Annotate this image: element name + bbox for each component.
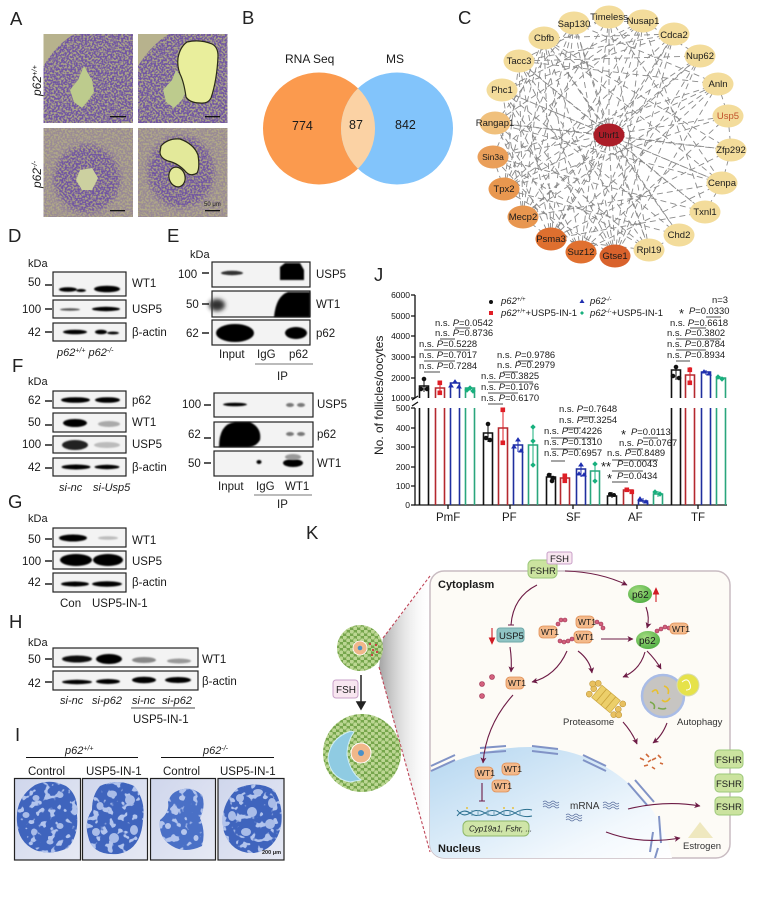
blot WT1 WT1 IP: WT1 (317, 458, 341, 470)
statistics AF (601, 426, 677, 486)
ovary control wild type (14, 778, 80, 860)
statistics PF: n.s. P=0.2979 (497, 359, 555, 370)
blot WT1 (28, 272, 156, 296)
peptide debris (640, 754, 663, 769)
statistics TF: n=3 (712, 294, 728, 305)
blot USP5: USP5 (132, 439, 162, 451)
statistics AF: P=0.0113 (631, 426, 671, 437)
label C: C (458, 7, 471, 28)
blot WT1: 50 (28, 277, 41, 289)
y tick labels: 100 (396, 481, 410, 491)
histology image bottom left (44, 128, 133, 217)
blot p62 WT1 IP (188, 422, 336, 447)
network nodes: Tacc3 (507, 56, 531, 67)
set label MS: MS (386, 52, 404, 66)
group label p62+/+: +/+ (83, 746, 93, 752)
proteasome (582, 677, 630, 721)
blot WT1 (28, 413, 156, 432)
blot beta-actin (28, 458, 167, 476)
statistics SF (544, 403, 617, 458)
statistics SF: n.s. P=0.6957 (544, 447, 602, 458)
blot USP5 (22, 551, 162, 569)
arrow to proteasome (578, 651, 592, 673)
y axis title: No. of follicles/oocytes (372, 336, 386, 455)
blot USP5 (22, 436, 162, 453)
FSH arrow (357, 675, 365, 709)
y tick labels: 200 (396, 462, 410, 472)
legend: p62 (590, 296, 606, 307)
network nodes: Chd2 (668, 230, 690, 241)
network nodes: Suz12 (568, 247, 594, 258)
free ubiquitin (480, 674, 494, 698)
kDa heading: kDa (28, 513, 48, 525)
y tick labels: 5000 (391, 311, 410, 321)
small follicle (337, 625, 383, 671)
gene box (463, 821, 532, 836)
inhibition WT1 to DNA (479, 783, 485, 801)
network nodes: Phc1 (491, 85, 513, 96)
panel C: interaction network (458, 6, 746, 268)
arrow p62 to proteasome (623, 652, 645, 677)
statistics PF (481, 349, 555, 403)
legend (489, 296, 663, 319)
blot USP5 p62 IP (178, 262, 346, 287)
statistics SF: n.s. P=0.7648 (559, 403, 617, 414)
sample labels: p62 (85, 347, 107, 359)
statistics PmF: n.s. P=0.0542 (435, 317, 493, 328)
set label RNA Seq: RNA Seq (285, 52, 334, 66)
statistics PmF: n.s. P=0.5228 (419, 338, 477, 349)
label A: A (10, 8, 23, 29)
arrow WT1 to nucleus (483, 695, 513, 763)
legend: +USP5-IN-1 (526, 308, 577, 319)
IP bracket (255, 364, 313, 383)
arrow autophagy to peptides (653, 723, 667, 743)
panel I: ovary sections (14, 724, 284, 860)
kDa heading: kDa (28, 637, 48, 649)
blot beta-actin: 42 (28, 327, 41, 339)
sample labels: si-nc (59, 482, 82, 494)
y tick labels: 0 (405, 500, 410, 510)
network nodes: Nup62 (686, 51, 714, 62)
legend: -/- (606, 309, 612, 315)
label K: K (306, 522, 319, 543)
ubiquitinated WT1 group: WT1 (576, 632, 594, 642)
category labels: PmF (436, 512, 460, 524)
statistics PmF: n.s. P=0.8736 (435, 327, 493, 338)
sample labels: si-Usp5 (93, 482, 131, 494)
FSHR stack (715, 750, 743, 815)
blot WT1: WT1 (132, 417, 156, 429)
statistics AF: P=0.0043 (617, 458, 657, 469)
legend: p62 (589, 308, 607, 319)
network nodes: Cdca2 (660, 30, 688, 41)
network nodes: Usp5 (717, 111, 739, 122)
blot USP5: USP5 (132, 304, 162, 316)
heading Nucleus: Nucleus (438, 843, 481, 855)
FSHR stack: FSHR (716, 779, 742, 790)
genotype label p62+/+: +/+ (30, 65, 39, 76)
data points and error bars (419, 365, 724, 503)
y tick labels: 6000 (391, 290, 410, 300)
statistics AF: * (607, 471, 612, 486)
blot p62 WT1 IP: 62 (188, 429, 201, 441)
blot p62: p62 (132, 395, 151, 407)
blot beta-actin: β-actin (132, 462, 167, 474)
network nodes: Uhrf1 (599, 130, 620, 140)
treatment bracket: USP5-IN-1 (133, 714, 189, 726)
FSH label box (333, 680, 358, 698)
count 774: 774 (292, 119, 313, 133)
column headers: Control (163, 766, 200, 778)
mRNA waves (543, 801, 619, 821)
blot WT1: 50 (28, 417, 41, 429)
panel A: histology (10, 12, 228, 217)
sample labels: p62 (57, 347, 75, 359)
blot p62: 62 (28, 395, 41, 407)
ubiquitinated WT1 group: WT1 (541, 627, 559, 637)
p62 with WT1: WT1 (672, 624, 690, 634)
panel D: western blot (8, 225, 167, 359)
ovary treated wild type (82, 778, 148, 860)
USP5: USP5 (499, 631, 524, 642)
category labels: SF (566, 512, 581, 524)
label E: E (167, 225, 179, 246)
panel G: western blot USP5-IN-1 (8, 491, 167, 610)
statistics AF: n.s. P=0.8489 (607, 447, 665, 458)
blot beta-actin: β-actin (202, 676, 237, 688)
blot p62 p62 IP (186, 320, 335, 345)
histology image top left (44, 34, 133, 123)
network nodes: Sin3a (482, 152, 504, 162)
network nodes: Psma3 (536, 234, 566, 245)
FSHR stack: FSHR (716, 755, 742, 766)
network nodes: Nusap1 (627, 16, 659, 27)
inhibition FSHR to USP5 (508, 585, 537, 625)
statistics AF: n.s. P=0.0767 (619, 437, 677, 448)
network nodes: Sap130 (558, 19, 590, 30)
red up arrow (654, 588, 658, 602)
blot USP5 WT1 IP (182, 393, 347, 417)
statistics TF: P=0.0330 (689, 305, 729, 316)
column headers: USP5-IN-1 (86, 766, 142, 778)
kDa heading: kDa (28, 376, 48, 388)
blot USP5 (22, 300, 162, 318)
legend: p62 (500, 308, 518, 319)
blot beta-actin: β-actin (132, 577, 167, 589)
FSH ligand top (547, 552, 572, 565)
blot beta-actin (28, 573, 167, 592)
bars blue (450, 372, 710, 505)
y tick labels (391, 290, 410, 510)
ovary treated knockout (218, 778, 284, 860)
blot WT1 p62 IP: 50 (186, 299, 199, 311)
mRNA label: mRNA (570, 801, 600, 812)
scale label: 200 μm (262, 850, 281, 856)
nuclear WT1 (475, 763, 522, 792)
p62 with WT1 (636, 623, 690, 649)
blot WT1: 50 (28, 654, 41, 666)
label F: F (12, 355, 23, 376)
statistics PmF (419, 317, 493, 371)
panel H: western blot si-p62 (9, 611, 237, 726)
count 842: 842 (395, 118, 416, 132)
blot WT1 WT1 IP (188, 451, 341, 476)
panel F: western blot si-Usp5 (12, 355, 167, 494)
ovary control knockout (150, 778, 216, 860)
ubiquitinated WT1 group: WT1 (578, 617, 596, 627)
arrow p62 to p62 (646, 607, 648, 628)
statistics PF: n.s. P=0.9786 (497, 349, 555, 360)
blot WT1 (28, 528, 156, 547)
column headers: Control (28, 766, 65, 778)
legend: -/- (606, 297, 612, 303)
histology image bottom right, traced (138, 128, 228, 217)
network nodes: Txnl1 (693, 207, 717, 218)
y axis and ticks (411, 295, 727, 509)
FSHR receptor top (528, 560, 557, 578)
zoom wedge (379, 578, 430, 852)
panel K: proposed mechanism (306, 522, 743, 858)
cell panel (430, 571, 730, 858)
y tick labels: 2000 (391, 373, 410, 383)
category labels (436, 512, 705, 524)
statistics TF: n.s. P=0.8784 (667, 338, 725, 349)
blot beta-actin: 42 (28, 577, 41, 589)
lane label IgG: IgG (256, 481, 275, 493)
blot USP5 p62 IP: 100 (178, 269, 197, 281)
y tick labels: 4000 (391, 331, 410, 341)
legend: +/+ (517, 309, 526, 315)
sample labels: USP5-IN-1 (92, 598, 148, 610)
bars green (466, 378, 726, 505)
y tick labels: 500 (396, 403, 410, 413)
nuclear WT1: WT1 (494, 781, 512, 791)
autophagosome (642, 674, 699, 717)
statistics AF: ** (601, 459, 611, 474)
network nodes: Anln (708, 79, 728, 90)
large follicle (323, 714, 401, 792)
statistics PmF: n.s. P=0.7017 (419, 349, 477, 360)
y tick labels: 3000 (391, 352, 410, 362)
lane label IgG: IgG (257, 349, 276, 361)
arrow FSHR to p62 (565, 571, 627, 585)
arrow nucleus to estrogen (606, 832, 680, 840)
FSH label box: FSH (336, 685, 356, 696)
heading Cytoplasm: Cytoplasm (438, 579, 494, 591)
lane label p62: p62 (289, 349, 308, 361)
ubiquitinated WT1 group (539, 616, 605, 644)
p62 top: p62 (632, 590, 649, 601)
genotype label p62-/-: -/- (30, 160, 39, 168)
network nodes: Gtse1 (602, 251, 628, 262)
blot beta-actin: β-actin (132, 327, 167, 339)
label I: I (15, 724, 20, 745)
network nodes: Zfp292 (716, 145, 746, 156)
lane label Input: Input (218, 481, 244, 493)
gene box: Cyp19a1, Fshr, ... (469, 824, 532, 834)
significance brackets (424, 317, 721, 482)
genotype label p62-/-: p62 (30, 168, 44, 188)
FSHR stack: FSHR (716, 802, 742, 813)
network nodes (476, 6, 746, 268)
kDa heading: kDa (28, 258, 48, 270)
blot p62 p62 IP: 62 (186, 328, 199, 340)
statistics AF: * (621, 427, 626, 442)
group label p62-/-: p62 (203, 745, 221, 757)
label G: G (8, 491, 22, 512)
blot USP5: 100 (22, 304, 41, 316)
p62 with WT1: p62 (639, 636, 656, 647)
blot USP5 WT1 IP: 100 (182, 399, 201, 411)
legend: +USP5-IN-1 (612, 308, 663, 319)
sample labels: +/+ (75, 348, 85, 354)
label Proteasome: Proteasome (563, 717, 614, 728)
statistics PF: n.s. P=0.1076 (481, 381, 539, 392)
statistics SF: n.s. P=0.4226 (544, 425, 602, 436)
lane label Input: Input (219, 349, 245, 361)
statistics PmF: n.s. P=0.7284 (419, 360, 477, 371)
lane label WT1: WT1 (285, 481, 309, 493)
panel J: follicle count bar chart (372, 264, 729, 524)
sample labels: si-nc (132, 695, 156, 707)
statistics SF: n.s. P=0.3254 (559, 414, 617, 425)
blot WT1: WT1 (202, 654, 226, 666)
blot WT1 WT1 IP: 50 (188, 458, 201, 470)
free WT1: WT1 (508, 678, 526, 688)
label Autophagy: Autophagy (677, 717, 723, 728)
bars red (436, 375, 694, 505)
circle RNA Seq (263, 72, 375, 184)
statistics AF: P=0.0434 (617, 470, 657, 481)
network nodes: Rpl19 (637, 245, 661, 256)
nuclear WT1: WT1 (477, 768, 495, 778)
category labels: PF (502, 512, 517, 524)
statistics SF: n.s. P=0.1310 (544, 436, 602, 447)
blot beta-actin (28, 671, 237, 690)
bars black (420, 370, 680, 505)
network nodes: Timeless (590, 12, 628, 23)
IP bracket: IP (277, 499, 288, 511)
sample labels: Con (60, 598, 81, 610)
label H: H (9, 611, 22, 632)
arrow proteasome to peptides (623, 722, 637, 744)
FSHR receptor top: FSHR (530, 566, 556, 577)
blot p62 p62 IP: p62 (316, 328, 335, 340)
nuclear WT1: WT1 (504, 764, 522, 774)
sample labels: -/- (107, 348, 114, 354)
blot p62 WT1 IP: p62 (317, 429, 336, 441)
blot p62 (28, 391, 151, 408)
DNA (457, 807, 532, 817)
network nodes: Tpx2 (493, 184, 515, 195)
kDa heading: kDa (190, 249, 210, 261)
arrow WT1 deubiquitinated (532, 651, 567, 682)
overlap (341, 88, 375, 169)
arrow WT1 to p62 (601, 638, 633, 640)
legend: +/+ (517, 297, 526, 303)
label J: J (374, 264, 383, 285)
FSH ligand top: FSH (550, 554, 569, 565)
histology image bottom right, traced: 50 μm (204, 202, 221, 208)
panel B: Venn diagram (242, 7, 453, 184)
panel E: co-immunoprecipitation (167, 225, 347, 511)
group label p62+/+: p62 (65, 745, 83, 757)
genotype label p62+/+: p62 (30, 76, 44, 96)
blot WT1: WT1 (132, 535, 156, 547)
sample labels: si-p62 (92, 695, 122, 707)
statistics PF: n.s. P=0.3825 (481, 370, 539, 381)
y tick labels: 400 (396, 423, 410, 433)
statistics PF: n.s. P=0.6170 (481, 392, 539, 403)
network nodes: Cbfb (534, 33, 554, 44)
network nodes: Rangap1 (476, 118, 514, 129)
estrogen pile (688, 822, 713, 838)
blot USP5 p62 IP: USP5 (316, 269, 346, 281)
label B: B (242, 7, 254, 28)
blot WT1 p62 IP: WT1 (316, 299, 340, 311)
red down arrow (490, 628, 494, 644)
group label p62-/- (161, 745, 274, 758)
blot beta-actin (28, 323, 167, 341)
y tick labels: 1000 (391, 393, 410, 403)
IP bracket: IP (277, 371, 288, 383)
zoom dashed lines (379, 576, 430, 852)
blot WT1 (28, 648, 226, 667)
IP bracket (254, 495, 312, 511)
blot beta-actin: 42 (28, 678, 41, 690)
blot WT1: WT1 (132, 278, 156, 290)
blot USP5: 100 (22, 439, 41, 451)
arrow p62 to autophagy (647, 651, 661, 669)
category labels: TF (691, 512, 705, 524)
y tick labels: 300 (396, 442, 410, 452)
statistics TF: n.s. P=0.3802 (667, 327, 725, 338)
blot beta-actin: 42 (28, 462, 41, 474)
sample labels: si-p62 (162, 695, 192, 707)
statistics TF: * (679, 306, 684, 321)
treatment bracket (131, 708, 195, 726)
label Estrogen: Estrogen (683, 841, 721, 852)
histology image top right, traced (138, 34, 228, 123)
sample labels: si-nc (60, 695, 83, 707)
blot USP5: 100 (22, 556, 41, 568)
blot WT1: 50 (28, 534, 41, 546)
group label p62-/-: -/- (221, 746, 229, 752)
legend: p62 (501, 296, 517, 307)
blot USP5 WT1 IP: USP5 (317, 399, 347, 411)
column headers: USP5-IN-1 (220, 766, 276, 778)
network nodes: Mecp2 (509, 212, 537, 223)
blot USP5: USP5 (132, 556, 162, 568)
category labels: AF (628, 512, 643, 524)
circle MS (341, 72, 453, 184)
arrow mRNA to FSHR (628, 804, 700, 809)
statistics TF (667, 294, 729, 360)
group label p62+/+ (26, 745, 138, 758)
statistics TF: n.s. P=0.6618 (670, 317, 728, 328)
nucleus (430, 746, 672, 858)
network nodes: Cenpa (708, 178, 737, 189)
statistics TF: n.s. P=0.8934 (667, 349, 725, 360)
blot WT1 p62 IP (186, 291, 340, 317)
network edges (493, 17, 731, 256)
arrow USP5 to WT1 (510, 647, 511, 672)
p62 top (628, 585, 652, 603)
label D: D (8, 225, 21, 246)
count 87: 87 (349, 118, 363, 132)
